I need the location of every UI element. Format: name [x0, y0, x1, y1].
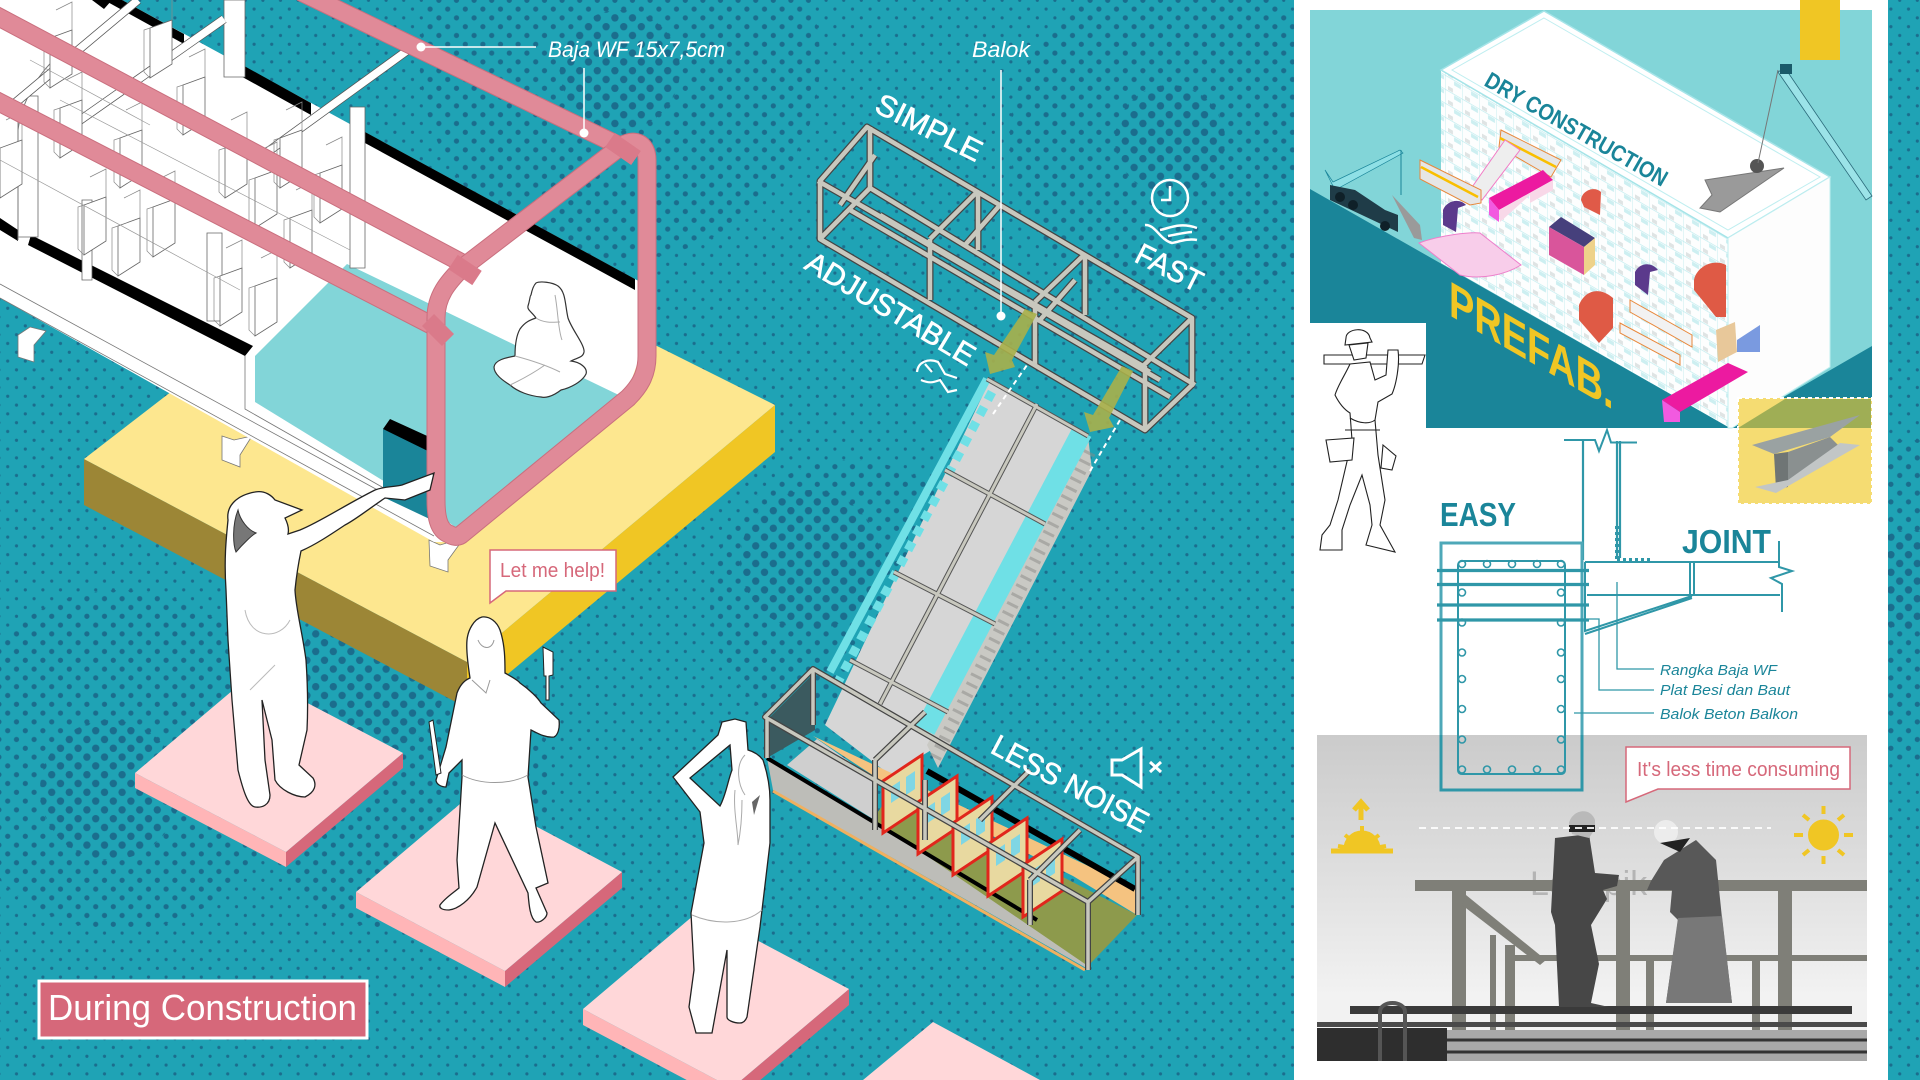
callout: Balok: Balok — [972, 37, 1031, 62]
rebar cage — [1458, 561, 1565, 774]
title badge: During Construction: During Construction — [48, 987, 357, 1028]
bookcase module — [1549, 217, 1595, 275]
worker carrying beam sketch — [1320, 330, 1425, 552]
carriage body — [0, 0, 644, 542]
panel: dry construction prefab — [1310, 0, 1872, 559]
column break line — [1564, 430, 1637, 451]
grey underside wall — [767, 758, 1088, 969]
right white panel — [1294, 0, 1888, 1080]
teal door panel — [383, 429, 436, 522]
hatched floor — [825, 380, 1088, 775]
speech bubble: Let me help!: Let me help! — [500, 560, 605, 582]
sitting girl — [494, 282, 586, 397]
red arch left — [1579, 291, 1613, 343]
pink plinth 2 — [356, 793, 622, 987]
joint detail drawing — [1437, 430, 1792, 790]
icon: muted speaker — [1112, 749, 1161, 787]
inset worker backdrop — [1310, 323, 1426, 559]
icon: wrench — [917, 360, 957, 392]
mid bridge module — [825, 379, 1092, 775]
balcony beam section — [1441, 543, 1582, 790]
label: Balok Beton Balkon: Balok Beton Balkon — [1660, 706, 1798, 723]
I-beam — [1752, 415, 1860, 493]
building end face — [1728, 177, 1830, 428]
building front face — [1441, 70, 1730, 428]
purple arch — [1443, 201, 1466, 232]
scaffold frame — [1415, 880, 1867, 1061]
woman from behind — [673, 719, 770, 1033]
prefab beam left — [1420, 160, 1481, 205]
pink steel frames — [0, 0, 647, 536]
dark teal ground — [1310, 189, 1872, 428]
magenta long module — [1662, 363, 1748, 422]
dashed sun path — [1419, 827, 1771, 829]
leader lines — [1574, 582, 1654, 713]
speech bubble: It's less time consuming: It's less time consuming — [1637, 759, 1840, 781]
slatted side wall — [927, 436, 1092, 768]
heading: DRY CONSTRUCTION: DRY CONSTRUCTION — [1481, 67, 1672, 191]
rebar circles — [1458, 560, 1564, 712]
heading: JOINT: JOINT — [1682, 523, 1771, 560]
hanging grey beam — [1392, 195, 1422, 240]
yellow platform — [84, 300, 775, 708]
small red arch — [1581, 189, 1601, 215]
pink plinth 4 — [863, 1022, 1040, 1080]
purple arch 2 — [1635, 264, 1658, 295]
building roof — [1441, 11, 1830, 238]
tower crane — [1778, 64, 1872, 200]
chisel — [429, 720, 441, 775]
heading: PREFAB.: PREFAB. — [1449, 270, 1614, 421]
long edge lines — [0, 284, 440, 536]
black wall strips — [0, 0, 635, 356]
dark glass end — [767, 672, 815, 758]
red arch right — [1694, 263, 1726, 317]
pink plinth 1 — [135, 674, 403, 867]
cyan rails — [830, 379, 987, 672]
woman pointing — [225, 473, 434, 807]
frame joints — [428, 140, 636, 340]
woman with trowel — [429, 617, 559, 922]
card yellow — [1738, 398, 1872, 504]
interior long lines — [0, 60, 350, 290]
white structural posts — [18, 0, 365, 321]
pink plinth 3 — [583, 910, 849, 1080]
label: LESS NOISE: LESS NOISE — [986, 729, 1154, 839]
sky — [1317, 735, 1867, 1061]
red panels — [883, 755, 1062, 917]
tube frame — [765, 669, 1138, 970]
support pedestals — [18, 327, 464, 572]
prefab beam upper right — [1499, 130, 1561, 177]
orange inner wall — [813, 736, 1137, 915]
black edge strips — [767, 758, 1037, 920]
magenta beam — [1489, 170, 1553, 222]
bottom completed module — [765, 669, 1138, 970]
icon: sunrise — [1331, 802, 1393, 851]
label: FAST: FAST — [1130, 238, 1208, 299]
yellow tab — [1800, 0, 1840, 60]
roof steel beam — [1700, 70, 1784, 212]
light teal backdrop — [1310, 10, 1872, 428]
trowel — [543, 647, 553, 700]
exploded steel frame — [818, 127, 1195, 430]
faint watermark: Lovepik — [1530, 865, 1648, 903]
front rounded frame — [436, 142, 647, 536]
break line right — [1771, 541, 1792, 612]
icon: sun — [1794, 806, 1853, 864]
long rails — [0, 0, 622, 329]
label: SIMPLE: SIMPLE — [870, 88, 988, 169]
column walls — [1583, 441, 1620, 560]
icon: clock and hand — [1145, 180, 1197, 243]
worker left — [1551, 811, 1619, 1007]
deck and lower yard — [1317, 1003, 1867, 1061]
label: Rangka Baja WF: Rangka Baja WF — [1660, 662, 1778, 679]
roof diagonals — [15, 0, 408, 161]
orange underside line — [773, 791, 1085, 970]
callout: Baja WF 15x7,5cm — [416, 37, 725, 138]
beam section overlay — [1441, 735, 1582, 790]
olive floor — [873, 790, 1137, 966]
callout: Balok — [972, 37, 1031, 320]
steel beam outline — [1585, 562, 1780, 634]
door top black — [383, 419, 436, 455]
anchor bolts — [1437, 570, 1589, 620]
seat row — [0, 0, 342, 336]
arch rib — [18, 55, 60, 240]
steel I-beam card — [1738, 398, 1872, 504]
olive band — [1738, 399, 1871, 428]
small colored unit — [1716, 322, 1760, 362]
interior posts and seats — [0, 0, 408, 336]
callout: Baja WF 15x7,5cm: Baja WF 15x7,5cm — [548, 37, 725, 62]
inner roof line — [1452, 18, 1820, 230]
prefab connector — [1470, 140, 1520, 200]
frame bars — [850, 379, 1088, 712]
label: ADJUSTABLE: ADJUSTABLE — [799, 246, 981, 373]
carriage white shell — [0, 0, 644, 542]
photo: workers on scaffold — [1317, 735, 1867, 1061]
label: Plat Besi dan Baut: Plat Besi dan Baut — [1660, 682, 1791, 699]
speech bubble: It's less time consuming — [1626, 747, 1850, 802]
installation arrows — [985, 309, 1133, 471]
title badge: During Construction — [39, 981, 367, 1038]
carriage floor — [255, 264, 625, 530]
truck crane — [1325, 150, 1403, 232]
plate bolts — [1617, 526, 1650, 560]
beam pair — [1620, 300, 1692, 365]
heading: EASY: EASY — [1440, 496, 1516, 533]
pink mesh — [1419, 233, 1521, 277]
worker right — [1647, 820, 1732, 1003]
speech bubble: Let me help! — [490, 550, 616, 603]
grey floor section — [787, 739, 877, 819]
